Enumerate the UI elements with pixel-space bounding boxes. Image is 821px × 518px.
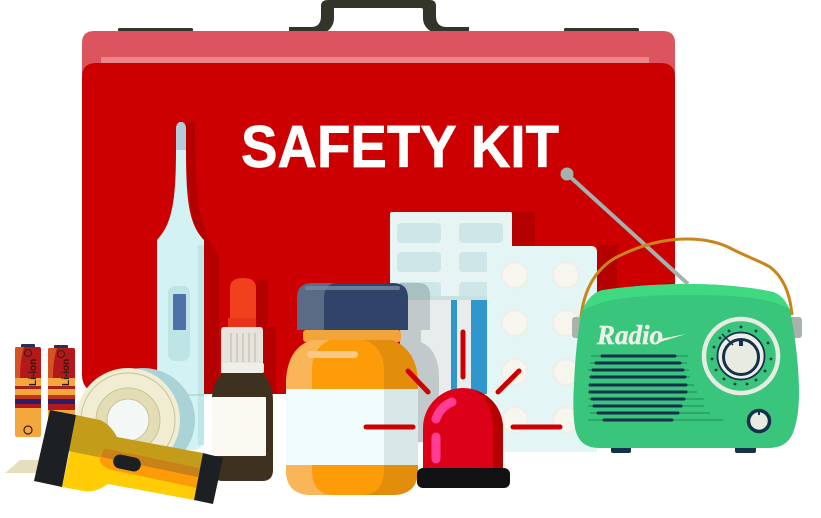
bottle cap [297,283,408,330]
flashlight upper body [68,415,203,477]
radio speaker grille [590,356,686,420]
red alarm siren [366,332,560,488]
flashlight orange stripe [100,449,200,488]
siren light rays [366,332,560,427]
flashlight lower body [62,450,203,500]
medicine box [405,300,490,444]
bottle label [286,389,418,465]
title: SAFETY KIT [241,114,559,180]
case left latch [118,28,193,33]
dropper bulb [230,278,256,320]
bottle body [286,340,418,495]
dropper bottle body [212,373,273,481]
tape roll [76,368,195,472]
thermometer [157,122,204,450]
radio volume knob [748,410,770,432]
case lid [82,31,675,100]
case front [82,63,675,394]
siren base [417,468,510,488]
siren highlights [436,402,452,419]
orange pill bottle [286,283,418,495]
radio tuning dial [704,319,778,393]
radio [560,168,802,453]
blister pack with capsules [390,212,512,302]
thermometer display [168,286,190,361]
dropper bottle label [212,397,266,456]
radio logo: Radio [596,320,663,350]
radio antenna [567,174,688,284]
dropper cap [221,327,263,373]
radio feet [611,446,631,453]
lid highlight [101,57,649,64]
box lower section [418,394,488,444]
radio side tabs [572,317,584,338]
flashlight right cap [194,453,223,504]
flashlight switch [112,453,142,473]
radio body [573,284,799,448]
flashlight beam tape end [5,460,42,473]
case right latch [564,28,639,33]
case handle [289,0,469,32]
radio speaker shadow lines [588,356,723,420]
batteries [15,344,75,438]
bottle neck [303,330,401,342]
blister pack with round pills [487,246,597,452]
dropper bottle [212,278,273,481]
flashlight [5,410,223,504]
item shadows on case [186,122,617,394]
bottle shadow [400,283,439,442]
flashlight left cap [34,410,76,487]
safety kit case [82,0,675,394]
siren dome [423,388,503,470]
battery 2: Li-ion [61,359,72,386]
battery 1: Li-ion [28,359,39,386]
radio carry strap [581,239,792,317]
